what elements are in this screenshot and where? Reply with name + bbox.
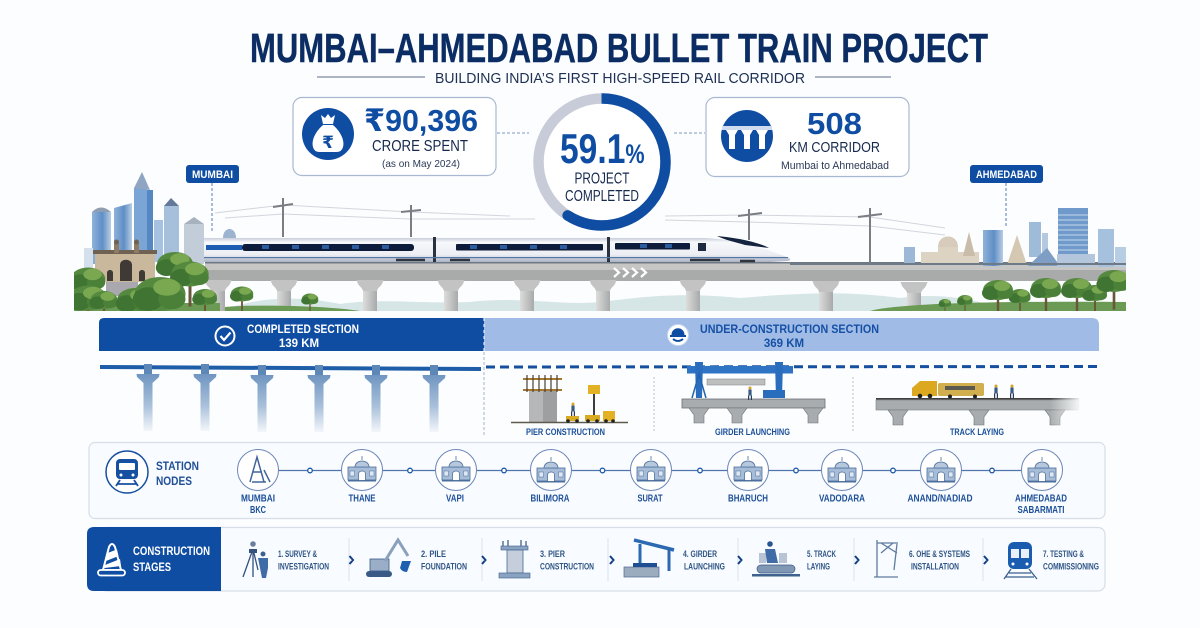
station: Vadodara: VADODARA	[819, 494, 865, 504]
station: Mumbai BKC: MUMBAI	[241, 494, 275, 504]
icon: money bag: ₹	[322, 133, 334, 152]
station: Mumbai BKC	[238, 450, 278, 516]
icon: money bag	[302, 108, 354, 160]
panel heading	[156, 459, 199, 488]
scene label: TRACK LAYING	[950, 427, 1004, 438]
figure: ₹90,396	[364, 103, 478, 138]
station: Anand/Nadiad: ANAND/NADIAD	[908, 494, 972, 504]
panel: construction stages	[87, 527, 1105, 591]
scene: track laying	[876, 381, 1082, 438]
stages heading block	[87, 527, 221, 591]
stage 5: track laying: 5. TRACK	[807, 549, 836, 559]
viaduct deck	[205, 262, 1126, 281]
completed section header	[99, 318, 484, 351]
ground greenery	[74, 302, 1126, 311]
connectors between cards and ring	[497, 132, 705, 134]
Gateway of India	[93, 240, 157, 296]
station: Ahmedabad Sabarmati: SABARMATI	[1018, 505, 1065, 516]
station: Thane: THANE	[348, 494, 376, 504]
station: Anand/Nadiad	[908, 450, 972, 504]
caption: CRORE SPENT	[372, 138, 468, 155]
stat card: crore spent	[293, 98, 496, 176]
stage 4: girder launching: LAUNCHING	[684, 562, 725, 572]
city label: Ahmedabad	[970, 165, 1043, 226]
stage 6: OHE and systems: 6. OHE & SYSTEMS	[909, 549, 970, 559]
under-construction section header: 369 KM	[764, 338, 804, 350]
stage 1: survey and investigation: 1. SURVEY &	[278, 549, 317, 559]
infographic canvas	[74, 33, 1126, 592]
dividers and chevrons	[349, 538, 988, 581]
panel heading: NODES	[156, 474, 192, 488]
stage 7: testing and commissioning: COMMISSIONING	[1043, 562, 1099, 572]
station: Bilimora	[530, 450, 572, 504]
Mumbai skyline	[84, 172, 236, 270]
stages heading block: CONSTRUCTION	[133, 546, 210, 558]
stage 1: survey and investigation	[243, 541, 329, 578]
stage 5: track laying	[752, 541, 836, 576]
completed section header: 139 KM	[279, 338, 319, 350]
station: Surat	[630, 450, 672, 504]
station: Vadodara	[819, 450, 865, 504]
station: Mumbai BKC: BKC	[250, 505, 266, 516]
stat card: corridor length	[706, 98, 909, 176]
scene: girder launching	[682, 362, 825, 438]
stage 3: pier construction: 3. PIER	[540, 549, 565, 559]
progress ring: 59.1%	[534, 94, 670, 230]
station: Vapi	[436, 450, 476, 504]
station: Thane	[342, 450, 382, 504]
stage 2: pile foundation: 2. PILE	[421, 549, 446, 559]
station: Surat: SURAT	[638, 494, 662, 504]
under-construction section header: UNDER-CONSTRUCTION SECTION	[700, 322, 879, 336]
viaduct piers	[206, 280, 928, 311]
progress section band	[99, 318, 1099, 435]
stage 3: pier construction: CONSTRUCTION	[540, 562, 594, 572]
Ahmedabad skyline	[904, 208, 1126, 267]
stage 4: girder launching: 4. GIRDER	[683, 549, 717, 559]
trees	[74, 252, 1126, 311]
figure: 508	[807, 106, 862, 141]
icon: traffic cone	[98, 544, 125, 576]
scene label: GIRDER LAUNCHING	[715, 427, 790, 438]
stage 4: girder launching	[624, 540, 725, 577]
hills in the background	[220, 293, 1010, 311]
stage 6: OHE and systems	[874, 540, 970, 577]
bullet train	[204, 236, 790, 262]
station: Bharuch	[728, 450, 768, 504]
route note: Mumbai to Ahmedabad	[781, 160, 889, 172]
icon: check circle	[216, 326, 234, 346]
stage 1: survey and investigation: INVESTIGATION	[278, 562, 329, 572]
stage 5: track laying: LAYING	[807, 562, 830, 572]
stage 7: testing and commissioning	[1004, 542, 1099, 579]
scene: pier construction	[511, 375, 628, 438]
route line	[278, 470, 1022, 472]
stage 2: pile foundation	[366, 540, 467, 577]
icon: train in circle	[106, 451, 148, 493]
viaduct railing right	[790, 263, 1126, 265]
subtitle: BUILDING INDIA’S FIRST HIGH-SPEED RAIL CORRIDOR	[435, 70, 805, 87]
station: Bilimora: BILIMORA	[530, 494, 570, 504]
station: Vapi: VAPI	[446, 494, 464, 504]
stage 6: OHE and systems: INSTALLATION	[911, 562, 959, 572]
dividers	[654, 377, 853, 433]
panel heading: STATION	[156, 459, 199, 473]
station: Ahmedabad Sabarmati: AHMEDABAD	[1015, 494, 1067, 504]
direction chevrons	[614, 268, 646, 277]
under-construction section header	[484, 318, 1099, 351]
completed viaduct deck	[100, 367, 481, 369]
panel: station nodes	[89, 442, 1105, 518]
completed section header: COMPLETED SECTION	[247, 322, 359, 336]
city label: Mumbai	[186, 165, 239, 232]
stage 3: pier construction	[499, 540, 594, 578]
date note: (as on May 2024)	[382, 158, 460, 170]
ring caption: COMPLETED	[565, 188, 639, 205]
caption: KM CORRIDOR	[789, 139, 880, 156]
ring caption: PROJECT	[574, 170, 630, 188]
stages heading block: STAGES	[133, 562, 171, 574]
completed piers	[136, 364, 446, 432]
stage 2: pile foundation: FOUNDATION	[421, 562, 467, 572]
planned deck dashed line	[486, 365, 1098, 368]
title: MUMBAI–AHMEDABAD BULLET TRAIN PROJECT	[250, 25, 988, 71]
scene label: PIER CONSTRUCTION	[526, 427, 605, 438]
ring caption	[565, 170, 639, 205]
icon: helmet	[668, 324, 688, 346]
station: Ahmedabad Sabarmati	[1015, 450, 1067, 516]
illustration: skyline, train and viaduct	[74, 172, 1126, 311]
station: Bharuch: BHARUCH	[728, 494, 768, 504]
city label: Ahmedabad: AHMEDABAD	[976, 169, 1037, 181]
route dots	[308, 468, 994, 473]
icon: viaduct	[721, 110, 773, 162]
overhead line masts and wires	[215, 198, 945, 265]
percentage: 59.1%	[560, 127, 645, 173]
stage 7: testing and commissioning: 7. TESTING &	[1043, 549, 1084, 559]
city label: Mumbai: MUMBAI	[192, 169, 233, 181]
